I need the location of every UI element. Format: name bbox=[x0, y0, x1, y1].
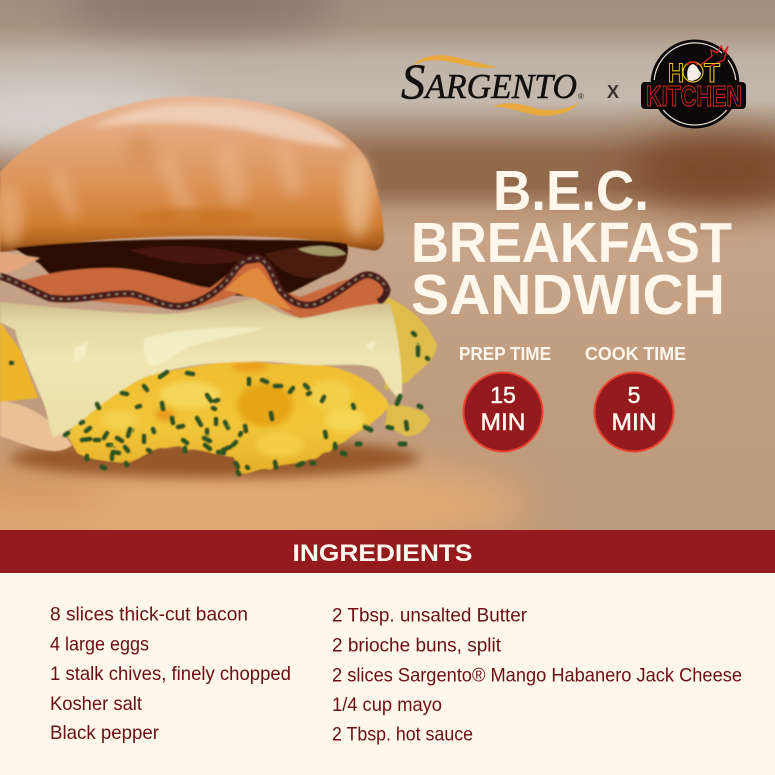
ingredients list: right column: 2 brioche buns, split bbox=[332, 635, 502, 657]
ingredients list: left column: 8 slices thick-cut bacon bbox=[50, 604, 248, 626]
ingredients heading band: INGREDIENTS bbox=[292, 540, 472, 567]
bottom bun bbox=[0, 400, 72, 451]
chives bbox=[11, 333, 428, 474]
HOT: H bbox=[668, 58, 684, 88]
logo disc bbox=[650, 40, 740, 128]
HOT bbox=[668, 58, 720, 88]
registered mark: ® bbox=[578, 92, 584, 101]
badge bbox=[464, 372, 542, 452]
wordmark: SARGENTO bbox=[401, 53, 577, 109]
chive highlights bbox=[110, 342, 418, 448]
collaboration x: X bbox=[607, 82, 619, 102]
ingredients list: left column: Black pepper bbox=[50, 722, 159, 744]
comb bbox=[687, 62, 698, 65]
value: 15 bbox=[490, 382, 516, 408]
kitchen banner bbox=[641, 82, 746, 109]
ingredients list: right column: 2 slices Sargento® Mango Habanero Jack Cheese bbox=[332, 665, 742, 687]
cook time bbox=[585, 343, 686, 452]
swoosh bottom bbox=[493, 102, 579, 116]
back egg chunk right bbox=[385, 296, 437, 436]
label: COOK TIME bbox=[585, 343, 686, 364]
hot O ring bbox=[683, 62, 703, 82]
melted cheese bbox=[0, 298, 402, 437]
prep time: MIN bbox=[480, 409, 526, 436]
egg lumps bbox=[102, 360, 365, 457]
cook time: MIN bbox=[612, 409, 656, 436]
egg left bbox=[0, 322, 38, 402]
title bbox=[411, 159, 732, 327]
lower bacon fill bbox=[0, 262, 388, 318]
background photo: blurred wooden table bbox=[0, 0, 775, 560]
flame bbox=[698, 46, 728, 67]
ingredients list: right column: 1/4 cup mayo bbox=[332, 694, 442, 716]
title: BREAKFAST bbox=[411, 211, 732, 275]
label: PREP TIME bbox=[459, 343, 551, 364]
ingredients list: left column: Kosher salt bbox=[50, 693, 143, 715]
ingredients list: right column bbox=[332, 605, 742, 746]
upper bacon bbox=[265, 247, 347, 278]
dark filling under bun bbox=[14, 239, 348, 298]
title: B.E.C. bbox=[493, 159, 649, 223]
value: 5 bbox=[628, 382, 640, 408]
ingredients list: left column: 4 large eggs bbox=[50, 634, 149, 656]
logo: Hot Kitchen bbox=[641, 40, 746, 128]
ingredients heading band bbox=[0, 530, 775, 573]
prep time bbox=[459, 343, 551, 452]
title: SANDWICH bbox=[411, 263, 725, 327]
swoosh top bbox=[413, 55, 498, 68]
bacon crust wavy edge bbox=[0, 258, 387, 306]
bun highlights bbox=[0, 104, 372, 245]
ingredients list: left column: 1 stalk chives, finely chopped bbox=[50, 663, 291, 685]
white ring bbox=[654, 43, 736, 125]
top bun bbox=[0, 96, 384, 252]
scrambled egg bbox=[68, 362, 388, 474]
chicken bbox=[687, 64, 701, 81]
logo: Sargento bbox=[401, 53, 584, 116]
ingredients list: left column bbox=[50, 604, 291, 744]
ingredients panel bbox=[0, 573, 775, 775]
KITCHEN: KITCHEN bbox=[646, 81, 742, 113]
HOT: T bbox=[704, 58, 720, 88]
sandwich illustration bbox=[0, 96, 437, 474]
badge bbox=[594, 372, 674, 452]
ingredients list: right column: 2 Tbsp. unsalted Butter bbox=[332, 605, 527, 627]
peach sauce at left bbox=[0, 252, 40, 273]
cheese highlights bbox=[74, 327, 376, 366]
ingredients list: right column: 2 Tbsp. hot sauce bbox=[332, 724, 473, 746]
